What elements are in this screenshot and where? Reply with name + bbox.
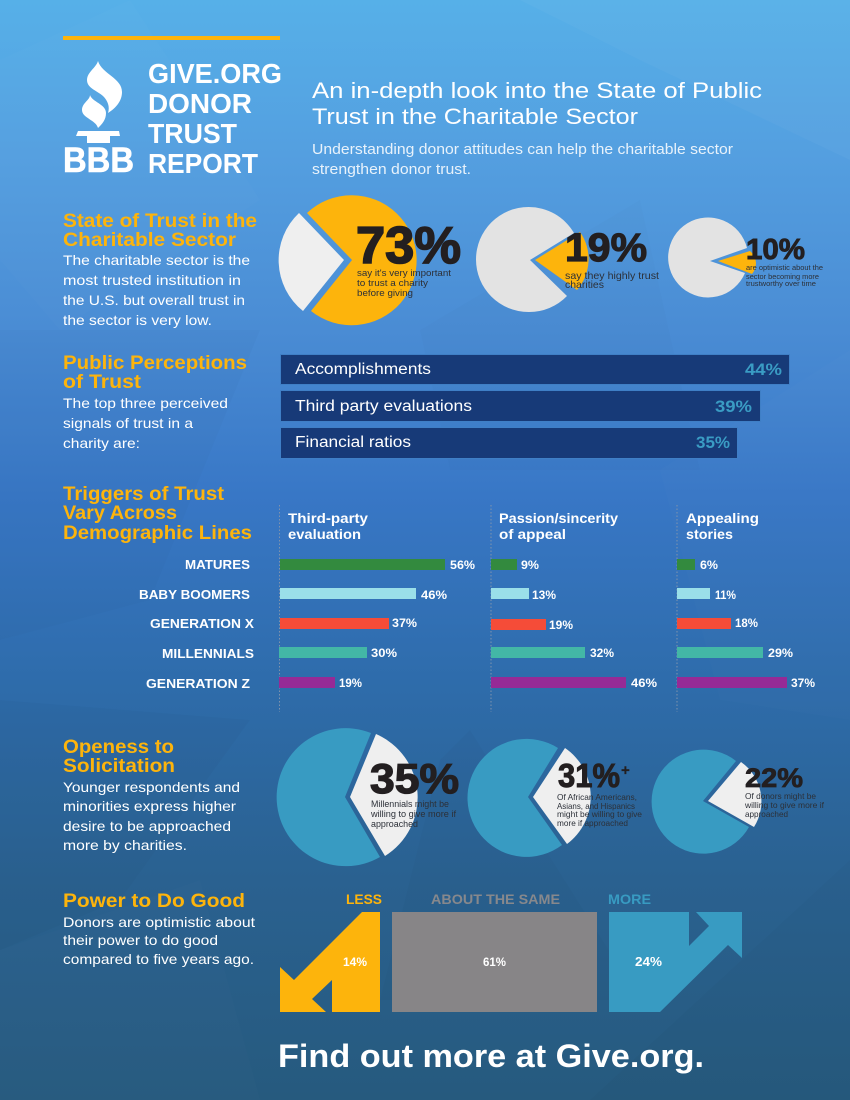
pie chart: 10%: trustworthy over time — [746, 281, 816, 288]
block: about the same 61% — [392, 891, 597, 1012]
section text: openess to solicitation — [63, 737, 240, 853]
generation labels: MILLENNIALS — [162, 646, 254, 661]
pie chart: 10% — [668, 217, 823, 297]
pie chart: 22%: Of donors might be — [745, 791, 816, 801]
section text: openess to solicitation: Younger respondents and — [63, 779, 240, 795]
bar chart: appealing stories: 18% — [735, 616, 758, 630]
bar chart: third-party evaluation — [279, 511, 475, 690]
bar chart: appealing stories: 29% — [768, 646, 793, 660]
pie chart: 19% — [476, 207, 659, 312]
pie chart: 19%: charities — [565, 279, 604, 291]
pie chart: 35%: 35% — [370, 755, 459, 802]
bar: financial ratios: Financial ratios — [295, 434, 411, 451]
bar chart: appealing stories — [677, 511, 815, 690]
section text: state of trust: the U.S. but overall trust in — [63, 292, 245, 308]
section text: public perceptions: of Trust — [63, 372, 142, 393]
bar chart: third-party evaluation: evaluation — [288, 527, 361, 542]
pie chart: 19%: 19% — [565, 226, 647, 270]
report title: GIVE.ORG — [148, 58, 282, 89]
headline — [312, 78, 762, 129]
bar: accomplishments: Accomplishments — [295, 361, 431, 378]
bar: third party evaluations: Third party evaluations — [295, 398, 472, 415]
arrow: more 24%: MORE — [608, 891, 651, 907]
section text: public perceptions: Public Perceptions — [63, 353, 247, 374]
section text: state of trust: the sector is very low. — [63, 312, 212, 328]
report title: REPORT — [148, 148, 258, 179]
section text: power to do good — [63, 891, 255, 967]
section text: state of trust — [63, 211, 257, 328]
bar: financial ratios — [280, 428, 738, 458]
section text: power to do good: their power to do good — [63, 932, 218, 948]
bar chart: passion/sincerity of appeal: 46% — [631, 676, 657, 690]
bar: third party evaluations — [280, 390, 760, 422]
bar chart: third-party evaluation: Third-party — [288, 511, 369, 526]
pie chart: 35%: Millennials might be — [371, 799, 449, 809]
section text: state of trust: State of Trust in the — [63, 211, 257, 232]
bar: financial ratios: 35% — [696, 433, 730, 452]
logo: BBB torch — [63, 61, 134, 180]
pie chart: 73% — [279, 195, 461, 325]
bar chart: appealing stories: stories — [686, 527, 733, 542]
bar chart: appealing stories: 37% — [791, 676, 815, 690]
pie chart: 10%: are optimistic about the — [746, 265, 823, 272]
pie chart: 22% — [652, 750, 825, 854]
section text: power to do good: Donors are optimistic about — [63, 914, 255, 930]
bar chart: third-party evaluation: 46% — [421, 588, 447, 602]
report title — [148, 58, 282, 179]
arrow: less 14% — [280, 891, 382, 1012]
section text: openess to solicitation: desire to be approached — [63, 818, 231, 834]
bar chart: third-party evaluation: 37% — [392, 616, 417, 630]
section text: power to do good: Power to Do Good — [63, 891, 245, 912]
generation labels: MATURES — [185, 557, 250, 572]
section text: public perceptions: The top three perceived — [63, 395, 228, 411]
section text: state of trust: The charitable sector is the — [63, 252, 250, 268]
section text: power to do good: compared to five years ago. — [63, 951, 254, 967]
arrow: more 24%: 24% — [635, 954, 662, 969]
pie chart: 31%+: Asians, and Hispanics — [557, 801, 635, 811]
section heading: triggers of trust: Vary Across — [63, 503, 177, 524]
pie chart: 73%: to trust a charity — [357, 278, 428, 289]
arrow: less 14%: 14% — [343, 955, 367, 969]
generation labels: BABY BOOMERS — [139, 587, 250, 602]
section text: public perceptions: signals of trust in a — [63, 415, 193, 431]
subheading: strengthen donor trust. — [312, 162, 471, 178]
pie chart: 35% — [277, 728, 459, 866]
section text: public perceptions — [63, 353, 247, 451]
report title: DONOR — [148, 88, 252, 119]
bar chart: passion/sincerity of appeal — [491, 511, 657, 690]
pie chart: 73%: before giving — [357, 288, 413, 299]
section text: openess to solicitation: minorities express higher — [63, 798, 236, 814]
bar chart: passion/sincerity of appeal: 32% — [590, 646, 614, 660]
bar chart: passion/sincerity of appeal: 13% — [532, 588, 556, 602]
pie chart: 73%: 73% — [356, 217, 461, 275]
block: about the same 61%: 61% — [483, 955, 506, 969]
headline: An in-depth look into the State of Public — [312, 78, 762, 103]
pie chart: 73%: say it's very important — [357, 268, 451, 279]
pie chart: 19%: say they highly trust — [565, 270, 659, 282]
section text: openess to solicitation: more by charities. — [63, 837, 187, 853]
bar: third party evaluations: 39% — [715, 397, 752, 416]
section text: openess to solicitation: Openess to — [63, 737, 174, 758]
bar chart: third-party evaluation: 30% — [371, 646, 397, 660]
pie chart: 22%: 22% — [745, 763, 803, 793]
section text: state of trust: most trusted institution in — [63, 272, 241, 288]
bar chart: appealing stories: 11% — [715, 588, 736, 602]
section text: openess to solicitation: Solicitation — [63, 756, 175, 777]
bar chart: passion/sincerity of appeal: 9% — [521, 558, 539, 572]
pie chart: 31%+ — [467, 739, 642, 857]
arrow: more 24% — [608, 891, 742, 1012]
pie chart: 31%+: 31% — [558, 757, 620, 794]
section text: public perceptions: charity are: — [63, 435, 140, 451]
pie chart: 22%: willing to give more if — [744, 800, 825, 810]
bar chart: passion/sincerity of appeal: 19% — [549, 618, 573, 632]
report title: TRUST — [148, 118, 237, 149]
arrow: less 14%: LESS — [346, 891, 382, 907]
bar chart: passion/sincerity of appeal: of appeal — [499, 527, 566, 542]
pie chart: 31%+: Of African Americans, — [557, 792, 637, 802]
bar: accomplishments: 44% — [745, 360, 782, 379]
bar chart: appealing stories: Appealing — [686, 511, 759, 526]
bar chart: third-party evaluation: 19% — [339, 676, 362, 690]
pie chart: 31%+: + — [621, 762, 630, 779]
pie chart: 35%: approached — [371, 819, 418, 829]
bar chart: passion/sincerity of appeal: Passion/sincerity — [499, 511, 619, 526]
generation labels: GENERATION X — [150, 616, 254, 631]
pie chart: 31%+: might be willing to give — [557, 809, 642, 819]
pie chart: 10%: 10% — [746, 234, 805, 266]
pie chart: 10%: sector becoming more — [746, 274, 819, 281]
top accent rule — [63, 36, 280, 40]
pie chart: 22%: approached — [745, 809, 788, 819]
call to action: Find out more at Give.org. — [278, 1038, 704, 1074]
section heading: triggers of trust: Triggers of Trust — [63, 484, 225, 505]
generation labels — [139, 557, 254, 691]
bar chart: third-party evaluation: 56% — [450, 558, 475, 572]
section heading: triggers of trust — [63, 484, 252, 544]
block: about the same 61%: ABOUT THE SAME — [431, 891, 560, 907]
subheading — [312, 142, 733, 178]
headline: Trust in the Charitable Sector — [312, 104, 638, 129]
subheading: Understanding donor attitudes can help the charitable sector — [312, 142, 733, 158]
section text: state of trust: Charitable Sector — [63, 230, 237, 251]
generation labels: GENERATION Z — [146, 676, 250, 691]
bar: accomplishments — [280, 354, 790, 384]
pie chart: 35%: willing to give more if — [370, 809, 457, 819]
bar chart: appealing stories: 6% — [700, 558, 718, 572]
pie chart: 31%+: more if approached — [557, 818, 628, 828]
section heading: triggers of trust: Demographic Lines — [63, 523, 252, 544]
logo: BBB torch: BBB — [63, 141, 134, 180]
